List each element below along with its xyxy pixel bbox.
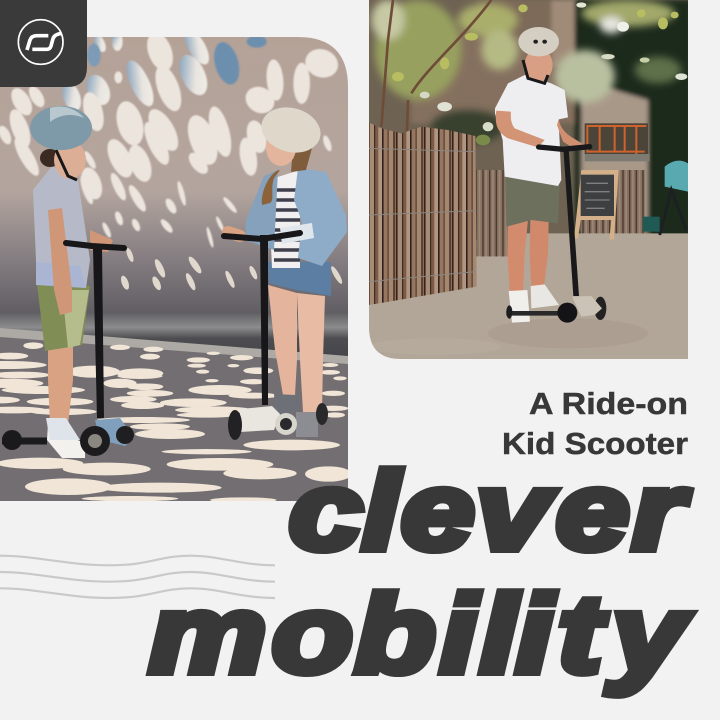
icon: rs logo [18,20,63,64]
boy with blue helmet [30,106,113,458]
girl with cream helmet [228,101,347,437]
beige scooter [506,147,606,323]
wooden fence [369,123,477,305]
background buildings and foliage [368,0,691,240]
back fence [476,170,645,257]
orange framed windows [585,123,650,161]
cobblestone ground [368,233,691,363]
subtitle [502,386,688,461]
decorative wave lines [0,556,275,598]
subtitle: Kid Scooter [502,426,688,461]
boy in white polo [495,27,585,323]
logo badge [0,0,87,87]
perforated facade wall [0,25,348,317]
bicycle with teal seat [643,161,688,235]
chalkboard sign [574,170,619,239]
dark wall band [0,312,348,356]
headline: mobility: mobility [149,572,691,696]
headline: clever: clever [289,449,690,573]
photo: two kids on scooters facing each other [0,25,352,503]
white scooter [224,233,328,440]
tree leaves [392,2,687,145]
blue scooter [2,243,134,456]
sunlit pavement [0,328,352,503]
photo: boy on scooter in courtyard [368,0,691,363]
subtitle: A Ride-on [529,386,688,421]
